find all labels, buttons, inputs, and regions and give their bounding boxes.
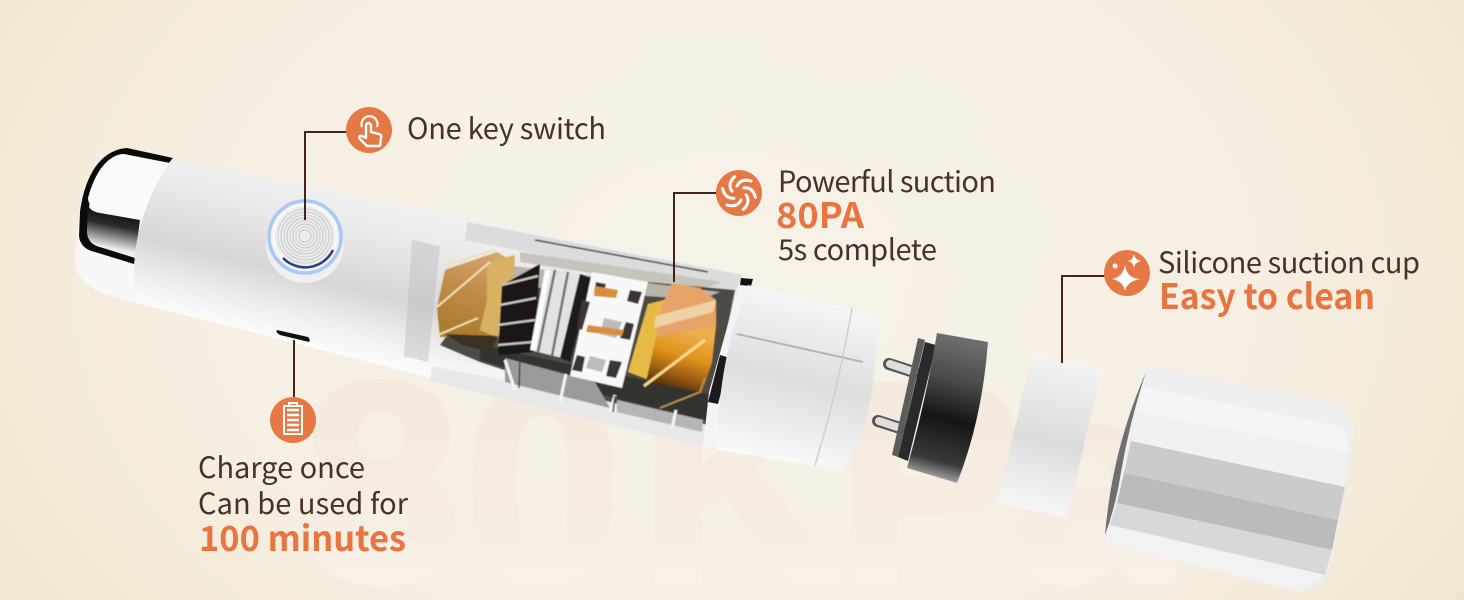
label: 100 minutes: [199, 511, 406, 562]
callout: powerful suction: [674, 159, 996, 282]
silver rings: [530, 268, 592, 362]
label: Powerful suction: [778, 159, 996, 201]
connector neck: [898, 342, 936, 461]
dark chamber: [440, 268, 735, 425]
product: outer cup: [1105, 365, 1353, 592]
label: Easy to clean: [1159, 269, 1375, 320]
label: One key switch: [407, 106, 606, 148]
icon: touch finger: [346, 107, 392, 153]
power button: [266, 201, 344, 283]
label: [198, 445, 409, 562]
gold cylinder: [628, 298, 672, 384]
callout: charging: [198, 340, 409, 562]
icon: battery: [270, 397, 316, 443]
translucent inner sleeve: [404, 240, 440, 362]
leader line: [674, 193, 717, 282]
label: Can be used for: [198, 481, 409, 523]
label: [776, 159, 996, 269]
dark gear: [498, 264, 540, 355]
top clear strip: [465, 222, 743, 292]
body end cap: [75, 148, 173, 303]
connector body: [907, 333, 988, 483]
leader line: [305, 132, 347, 220]
icon: sparkle: [1104, 250, 1150, 296]
left fan: [437, 250, 515, 352]
lower clear strip: [430, 366, 705, 447]
callout: silicone suction cup: [1062, 240, 1420, 363]
label: Charge once: [198, 445, 365, 487]
cup inner rim: [1105, 372, 1146, 535]
label: [1158, 240, 1420, 320]
front cap: [717, 285, 877, 470]
white cage: [570, 272, 648, 388]
icon: fan swirl: [716, 170, 762, 216]
connector flange: [892, 338, 925, 457]
charging port: [276, 330, 310, 342]
collar: [703, 281, 752, 448]
orange fan: [644, 283, 716, 408]
leader line: [293, 340, 295, 397]
leader line: [1062, 276, 1105, 363]
main body sleeve and transparent section: [134, 158, 743, 447]
motor internals: [430, 222, 743, 447]
product: silicone suction cup ring: [997, 353, 1102, 518]
connector pins: [878, 364, 914, 428]
label: Silicone suction cup: [1158, 240, 1420, 282]
callout: one key switch: [305, 106, 606, 220]
product: vacuum body: [75, 148, 877, 470]
product: motor connector: [878, 333, 988, 483]
label: 80PA: [776, 188, 865, 239]
label: 5s complete: [778, 227, 937, 269]
